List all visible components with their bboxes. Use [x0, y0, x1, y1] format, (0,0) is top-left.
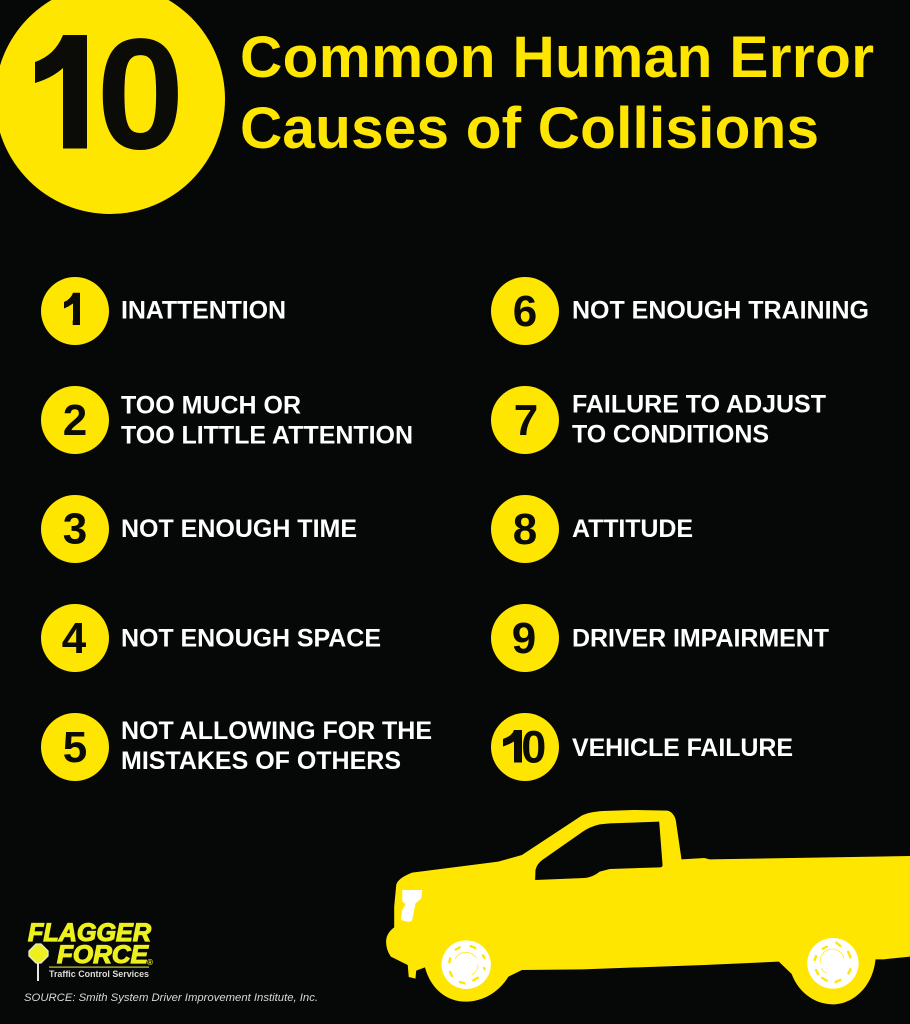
logo: Flagger Force: ®: [147, 958, 153, 967]
list item 10: 0: [521, 722, 546, 772]
rear wheel: [807, 938, 859, 989]
list item 5: [41, 713, 432, 781]
list item 8: ATTITUDE: [572, 515, 693, 543]
truck cab window: [535, 822, 663, 880]
title: Causes of Collisions: [240, 96, 819, 161]
badge: big number 10: 1: [31, 6, 119, 182]
front wheel: [442, 940, 491, 989]
list item 7: TO CONDITIONS: [572, 420, 769, 448]
list item 6: NOT ENOUGH TRAINING: [572, 296, 869, 324]
list item 9: [491, 604, 829, 672]
list item 4: [41, 604, 381, 672]
list item 7: [491, 386, 826, 454]
badge: big number 10: [0, 0, 225, 214]
logo: Flagger Force: [28, 919, 153, 981]
list item 1: 1: [65, 286, 89, 335]
list item 9: 9: [512, 614, 536, 663]
list item 4: NOT ENOUGH SPACE: [121, 625, 381, 653]
list item 5: 5: [63, 723, 87, 772]
list item 7: FAILURE TO ADJUST: [572, 390, 826, 418]
list item 10: [491, 713, 793, 781]
list item 8: 8: [513, 505, 537, 554]
list item 1: [41, 277, 286, 345]
list item 3: NOT ENOUGH TIME: [121, 515, 357, 543]
title: [240, 25, 874, 161]
list item 5: MISTAKES OF OTHERS: [121, 747, 401, 775]
list item 4: 4: [62, 614, 87, 663]
list item 7: 7: [514, 396, 538, 445]
list item 3: [41, 495, 357, 563]
logo: Flagger Force: FORCE: [57, 941, 149, 969]
list item 5: NOT ALLOWING FOR THE: [121, 717, 432, 745]
list item 10: VEHICLE FAILURE: [572, 734, 793, 762]
truck headlight: [401, 890, 422, 922]
icon: pickup truck silhouette: [386, 810, 910, 1004]
list item 2: 2: [63, 396, 87, 445]
logo: Flagger Force: Traffic Control Services: [49, 969, 149, 979]
list item 9: DRIVER IMPAIRMENT: [572, 625, 829, 653]
source credit: SOURCE: Smith System Driver Improvement Institute, Inc.: [24, 992, 318, 1004]
logo: Flagger Force: FLAGGER: [28, 919, 151, 947]
list item 10: 1: [507, 722, 532, 772]
list item 1: INATTENTION: [121, 296, 286, 324]
logo sign icon: [29, 944, 48, 981]
list item 2: [41, 386, 413, 454]
badge: big number 10: 0: [96, 6, 184, 182]
title: Common Human Error: [240, 25, 874, 90]
list item 6: 6: [513, 287, 537, 336]
list item 6: [491, 277, 869, 345]
list item 8: [491, 495, 693, 563]
list item 2: TOO LITTLE ATTENTION: [121, 421, 413, 449]
list item 2: TOO MUCH OR: [121, 391, 301, 419]
list item 3: 3: [63, 504, 87, 554]
